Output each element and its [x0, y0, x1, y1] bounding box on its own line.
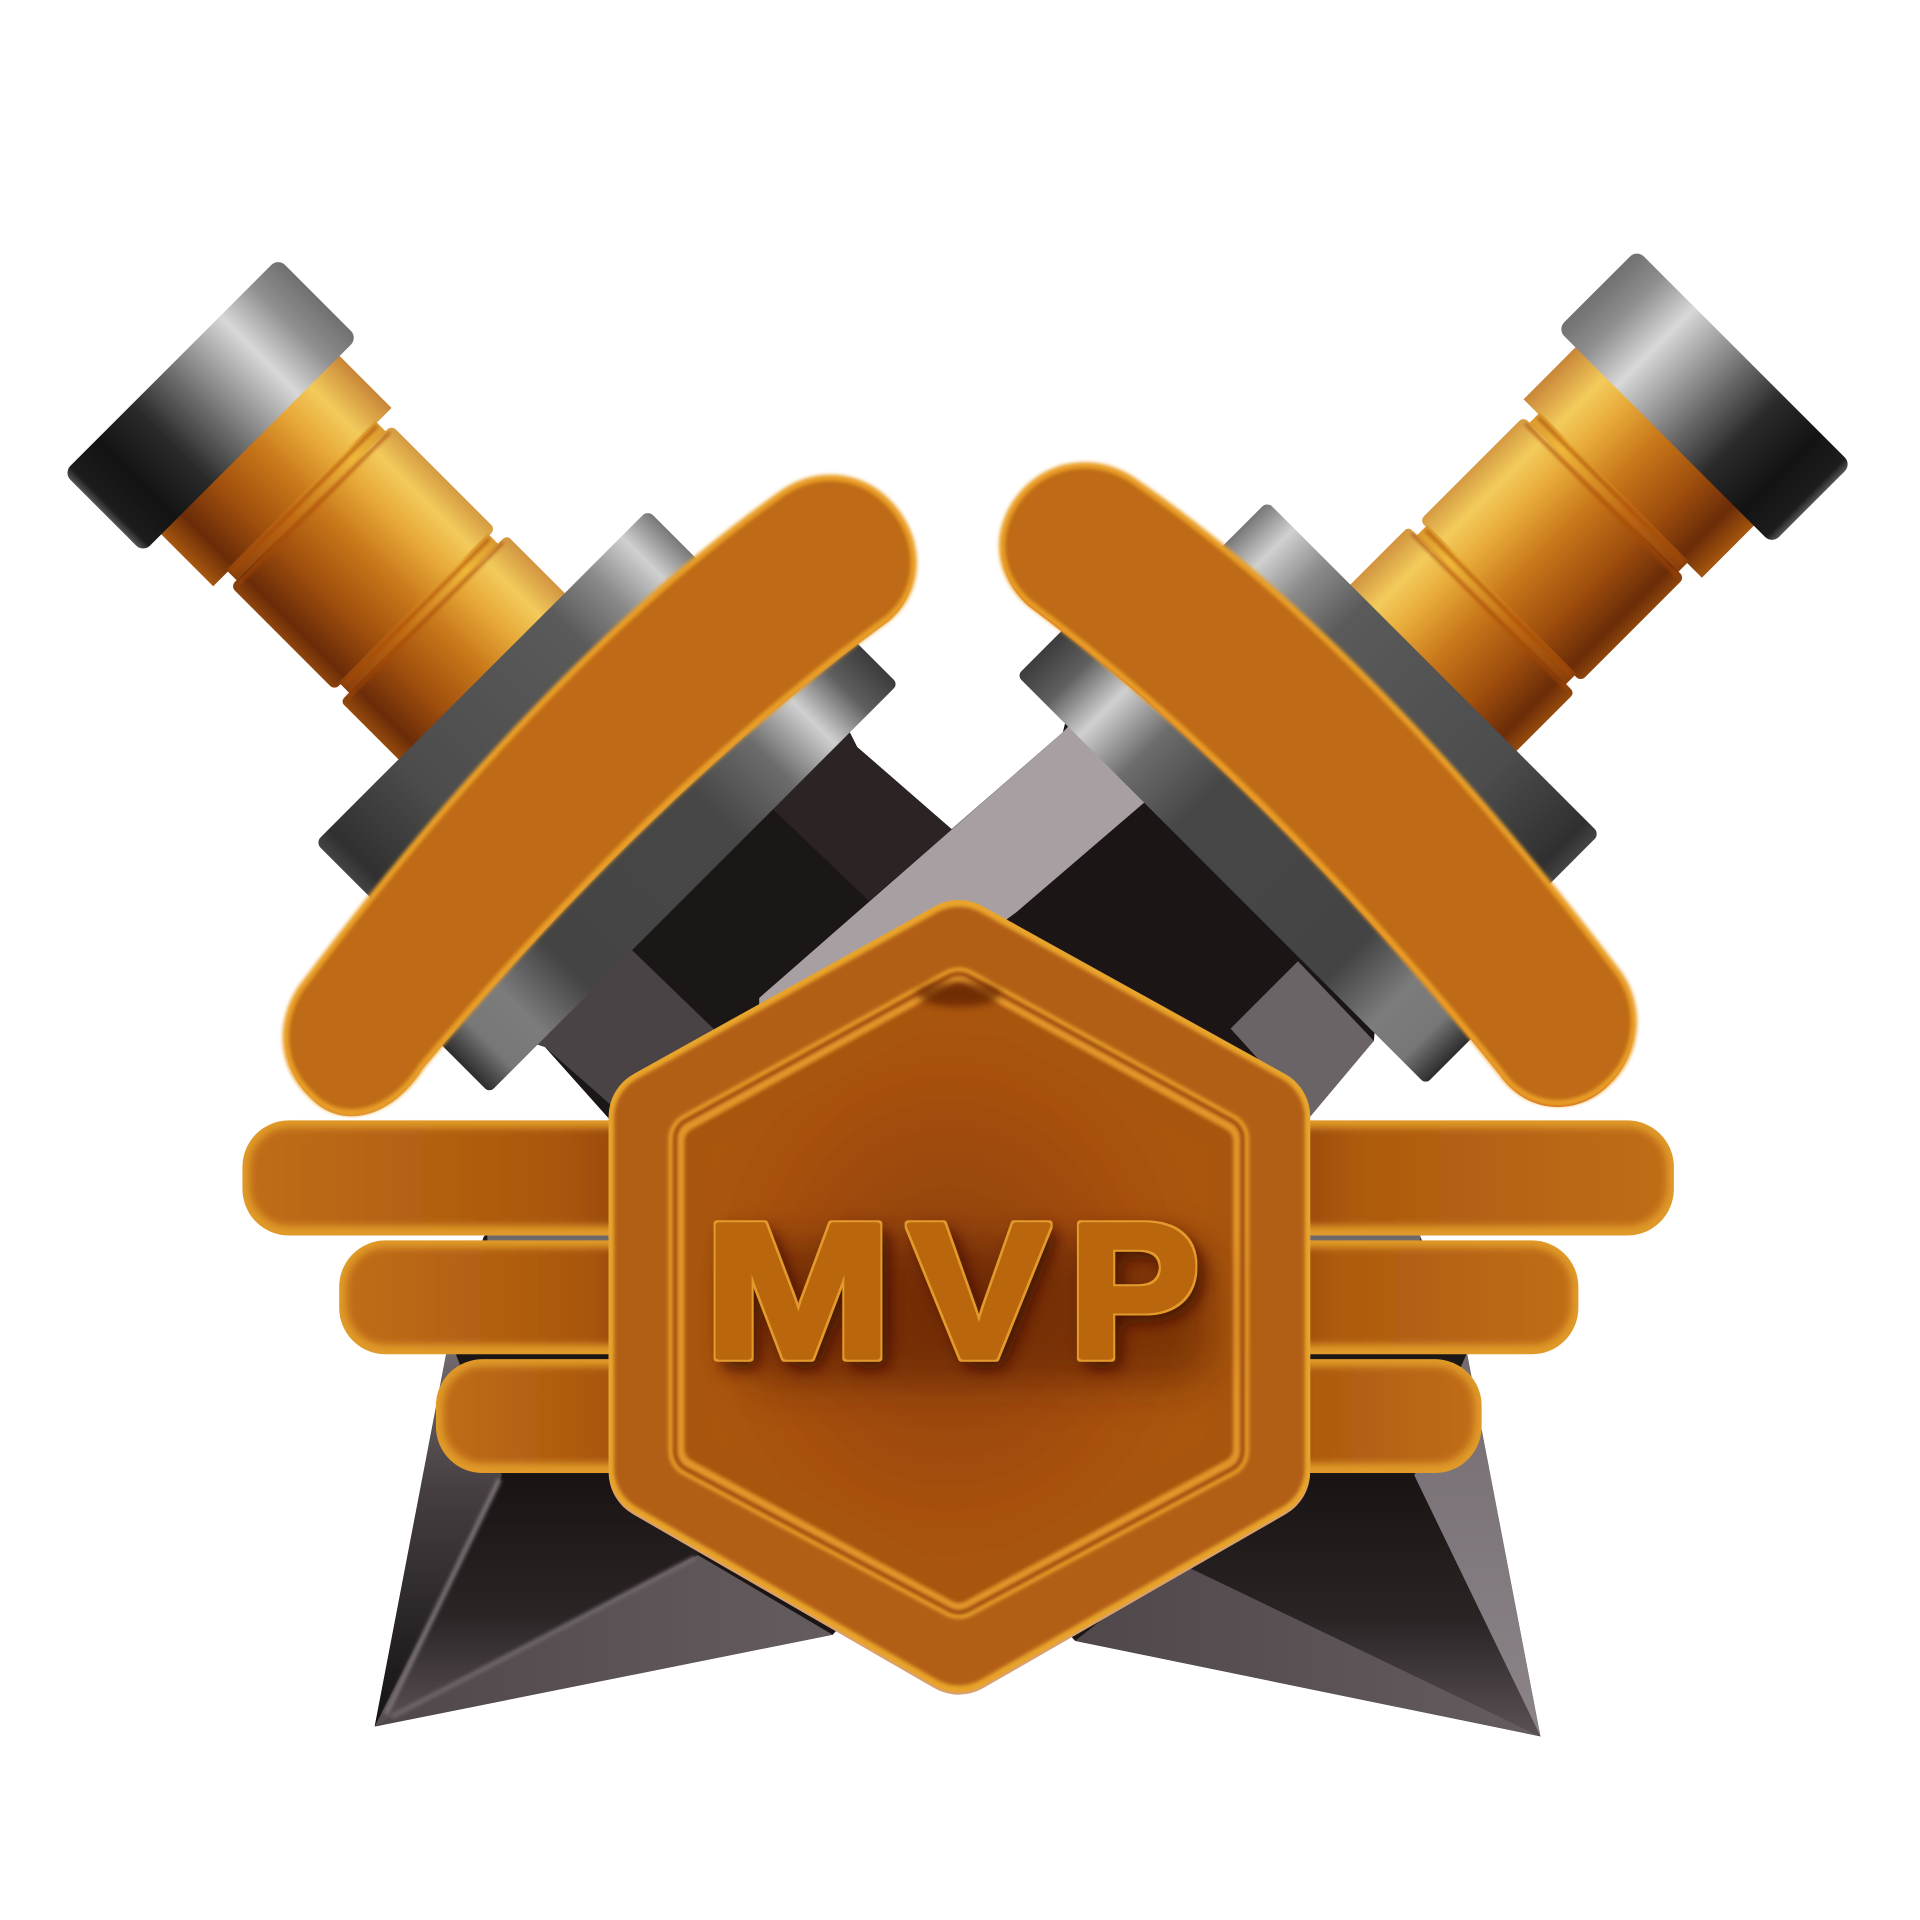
badge text: MVP: P: [1069, 1183, 1199, 1397]
guard plate: right front disc: [1017, 565, 1537, 1084]
pommel: right: [1557, 250, 1852, 544]
wing: right three bars: [1254, 1120, 1674, 1473]
right sword hilt: [1017, 153, 1920, 1084]
wing: left three bars: [242, 1120, 666, 1473]
badge text: MVP: M: [704, 1185, 892, 1398]
crossguard: right curved bar: [1002, 465, 1634, 1107]
guard plate: left rear disc: [315, 510, 756, 951]
left sword hilt: [0, 161, 898, 1093]
blade: left-handled sword pointing bottom right: [527, 722, 1540, 1736]
pommel: left: [63, 258, 358, 552]
handle: right grip segments: [1340, 342, 1759, 761]
guard plate: left front disc: [379, 573, 898, 1093]
badge outer rim: [658, 949, 1261, 1646]
badge text: MVP: V: [909, 1184, 1049, 1398]
blade: right-handled sword pointing bottom left: [375, 698, 1378, 1727]
handle: left grip segments: [156, 351, 575, 770]
badge inner ridge and face: [696, 982, 1222, 1592]
badge text: MVP: [704, 1183, 1199, 1398]
hexagon badge: [658, 949, 1261, 1646]
guard plate: right rear disc: [1159, 502, 1600, 942]
crossguard: left curved bar: [286, 478, 914, 1116]
